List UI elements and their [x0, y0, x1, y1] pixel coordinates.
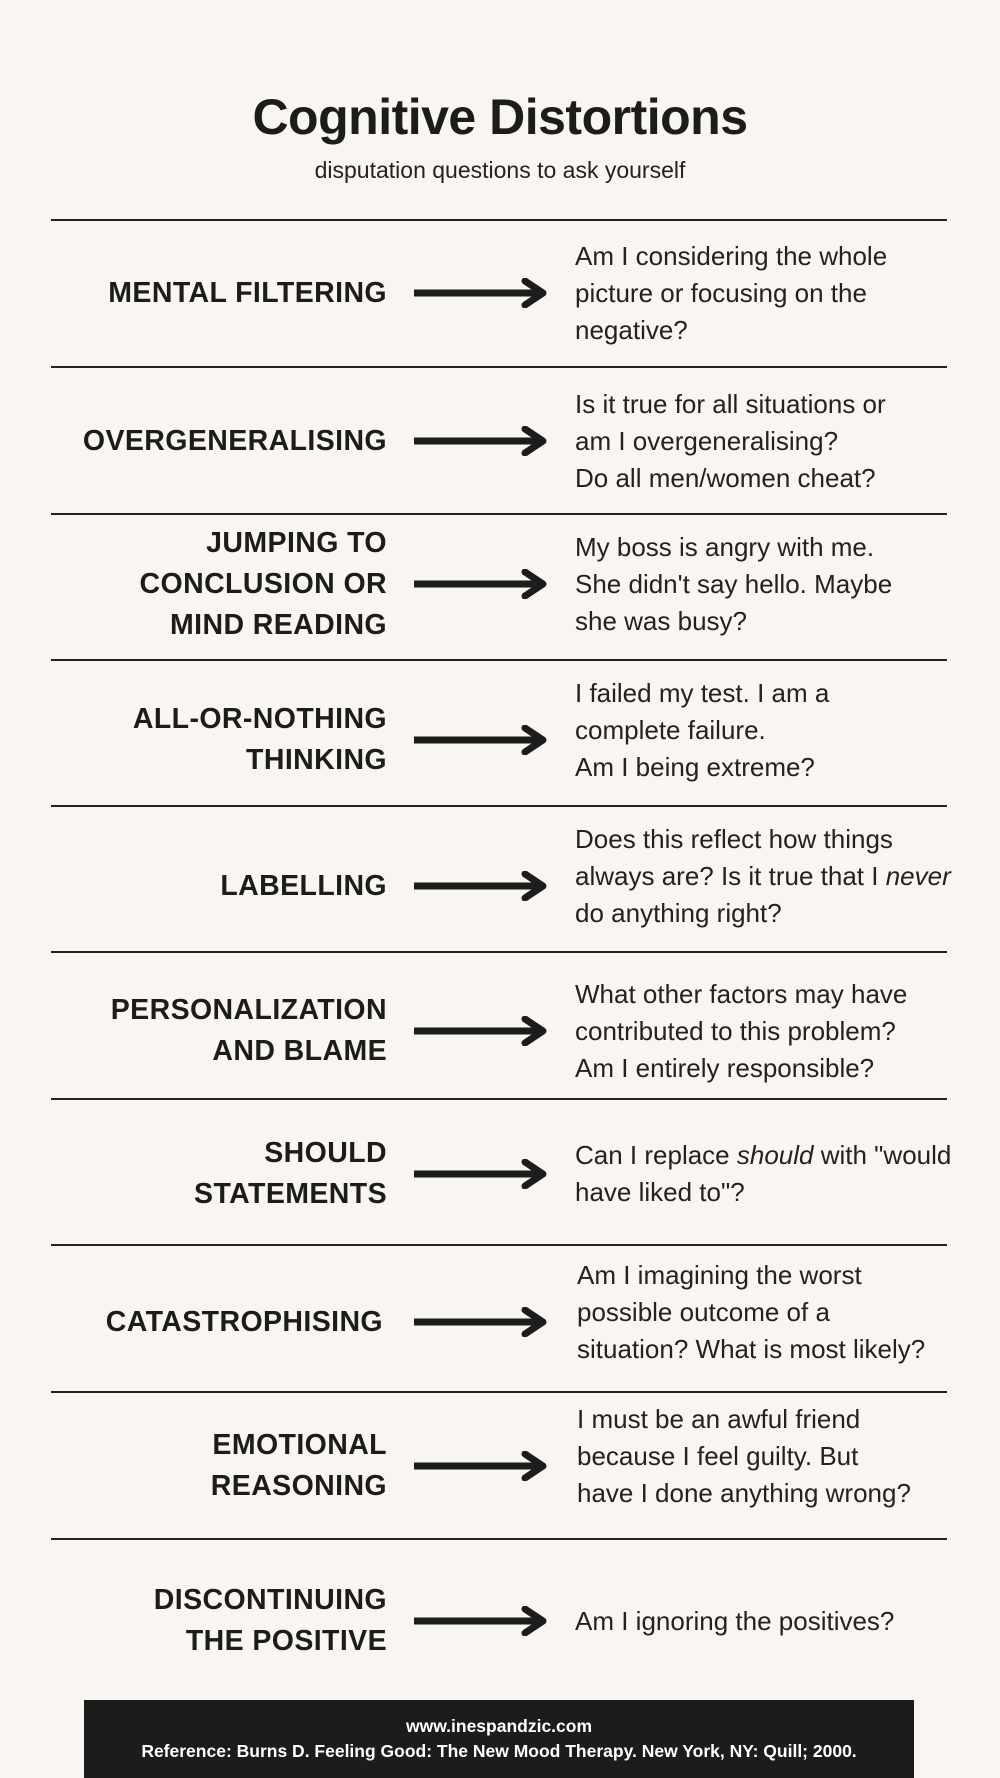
row: discontinuing the positive [154, 1584, 894, 1657]
label [211, 1429, 387, 1502]
question: What other factors may have [575, 978, 907, 1008]
row: jumping to conclusion [140, 526, 892, 640]
question: complete failure. [575, 714, 766, 744]
question: contributed to this problem? [575, 1016, 896, 1046]
question: because I feel guilty. But [577, 1440, 858, 1470]
label: ALL-OR-NOTHING [133, 703, 387, 735]
question: Does this reflect how things [575, 824, 893, 854]
question [575, 824, 952, 928]
question: I failed my test. I am a [575, 678, 829, 708]
question: Can I replace should with "would [575, 1140, 951, 1170]
row: labelling [220, 824, 952, 928]
label [140, 526, 387, 640]
subtitle: disputation questions to ask yourself [315, 157, 685, 183]
label: MIND READING [170, 608, 387, 640]
question [575, 532, 892, 636]
label: MENTAL FILTERING [108, 276, 387, 308]
label: STATEMENTS [194, 1178, 387, 1210]
row: catastrophising [106, 1260, 925, 1364]
question: possible outcome of a [577, 1296, 830, 1326]
question: Am I being extreme? [575, 752, 815, 782]
question: situation? What is most likely? [577, 1334, 925, 1364]
label [111, 994, 387, 1067]
row: should statements [194, 1137, 951, 1210]
label: REASONING [211, 1470, 387, 1502]
title: Cognitive Distortions [252, 89, 748, 145]
question: do anything right? [575, 898, 782, 928]
question: always are? Is it true that I never [575, 860, 951, 890]
arrow [414, 1307, 546, 1337]
label: OVERGENERALISING [83, 424, 387, 456]
label: CATASTROPHISING [106, 1306, 383, 1338]
label: CONCLUSION OR [140, 568, 387, 600]
question: picture or focusing on the [575, 278, 867, 308]
question: have I done anything wrong? [577, 1478, 911, 1508]
question: am I overgeneralising? [575, 426, 838, 456]
arrow [414, 278, 546, 308]
question [575, 240, 887, 344]
label [194, 1137, 387, 1210]
label: EMOTIONAL [212, 1429, 387, 1461]
arrow [414, 1451, 546, 1481]
question: Am I ignoring the positives? [575, 1606, 894, 1636]
row: all-or-nothing [133, 678, 830, 782]
label: THE POSITIVE [186, 1625, 387, 1657]
question: Do all men/women cheat? [575, 462, 876, 492]
label [133, 703, 387, 776]
arrow [414, 1606, 546, 1636]
question: My boss is angry with me. [575, 532, 874, 562]
arrow [414, 871, 546, 901]
label: SHOULD [264, 1137, 387, 1169]
question: Is it true for all situations or [575, 388, 886, 418]
label: DISCONTINUING [154, 1584, 387, 1616]
footer: www.inespandzic.com [406, 1716, 592, 1736]
row: personalization [111, 978, 907, 1082]
question [575, 388, 886, 492]
label [154, 1584, 387, 1657]
row: overgeneralising [83, 388, 886, 492]
label: LABELLING [220, 870, 387, 902]
arrow [414, 725, 546, 755]
label: JUMPING TO [206, 526, 387, 558]
question [575, 678, 830, 782]
arrow [414, 426, 546, 456]
arrow [414, 1159, 546, 1189]
question [577, 1260, 925, 1364]
label: AND BLAME [212, 1035, 387, 1067]
footer: Reference: Burns D. Feeling Good: The New Mood Therapy. New York, NY: Quill; 2000. [141, 1741, 857, 1761]
question: I must be an awful friend [577, 1404, 860, 1434]
question: She didn't say hello. Maybe [575, 568, 892, 598]
question: have liked to"? [575, 1177, 745, 1207]
question: she was busy? [575, 606, 747, 636]
row: emotional reasoning [211, 1404, 911, 1508]
question: Am I imagining the worst [577, 1260, 862, 1290]
label: THINKING [246, 744, 387, 776]
label: PERSONALIZATION [111, 994, 387, 1026]
question: Am I entirely responsible? [575, 1052, 874, 1082]
question: Am I considering the whole [575, 240, 887, 270]
question: negative? [575, 314, 688, 344]
question [575, 978, 907, 1082]
arrow [414, 569, 546, 599]
question [575, 1140, 951, 1207]
footer [84, 1700, 914, 1778]
question [577, 1404, 911, 1508]
arrow [414, 1016, 546, 1046]
row: mental filtering [108, 240, 887, 344]
